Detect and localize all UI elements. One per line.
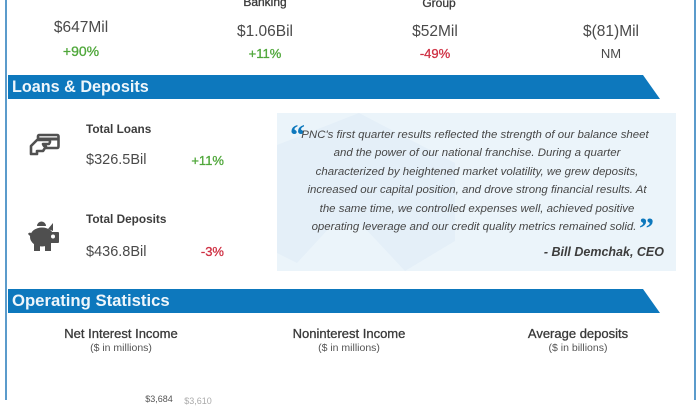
chart heading: Average deposits: Average deposits xyxy=(528,326,628,341)
chart subheading: net interest units: ($ in millions) xyxy=(90,342,152,354)
quote line 6: operating leverage and our credit quality metrics remained solid. xyxy=(312,221,636,233)
chart subheading: deposits units: ($ in billions) xyxy=(549,342,607,354)
chart heading: Noninterest Income: Noninterest Income xyxy=(293,326,405,341)
chart data label: $3,684 xyxy=(145,394,173,404)
chart heading: Net Interest Income: Net Interest Income xyxy=(64,326,178,341)
banner: Operating Statistics xyxy=(8,289,660,313)
text: Total Loans label: Total Loans xyxy=(86,122,151,136)
segment: other value: $(81)Mil xyxy=(583,23,639,40)
panel: CEO quote xyxy=(277,113,676,271)
segment: first segment change: +90% xyxy=(63,43,99,59)
segment: banking change: +11% xyxy=(249,46,281,61)
segment: group change: -49% xyxy=(420,46,450,61)
chart data label: second bar: $3,610 xyxy=(184,396,212,406)
quote line 1: PNC's first quarter results reflected the strength of our balance sheet xyxy=(301,129,649,141)
page border right xyxy=(694,0,696,400)
text: Total Loans value: $326.5Bil xyxy=(86,152,146,168)
icon: hand holding card xyxy=(30,134,60,156)
quote line 4: increased our capital position, and drove strong financial results. At xyxy=(307,184,647,196)
quote attribution: - Bill Demchak, CEO xyxy=(544,245,664,259)
text: Total Deposits label: Total Deposits xyxy=(86,212,166,226)
banner: Operating Statistics: Operating Statistics xyxy=(12,291,170,310)
icon: closing quote mark: ” xyxy=(639,212,654,245)
segment: group value: $52Mil xyxy=(412,23,458,40)
text: Total Loans change: +11% xyxy=(191,153,224,168)
text: Total Deposits change: -3% xyxy=(201,244,224,259)
chart subheading: noninterest units: ($ in millions) xyxy=(318,342,380,354)
quote line 5: the same time, we controlled expenses well, achieved positive xyxy=(320,203,634,215)
text: Total Deposits value: $436.8Bil xyxy=(86,244,146,260)
icon: opening quote mark: “ xyxy=(290,119,305,152)
page border left xyxy=(5,0,6,400)
segment: banking value: $1.06Bil xyxy=(237,23,293,40)
quote line 3: characterized by heightened market volatility, we grew deposits, xyxy=(316,166,638,178)
watermark logo xyxy=(277,113,676,271)
segment: other change: NM xyxy=(601,46,621,61)
banner: Loans & Deposits: Loans & Deposits xyxy=(12,78,149,96)
banner: Loans & Deposits xyxy=(8,75,660,99)
segment: first segment value: $647Mil xyxy=(54,19,108,36)
quote line 2: and the power of our national franchise. During a quarter xyxy=(334,147,620,159)
icon: piggy bank xyxy=(28,222,59,251)
